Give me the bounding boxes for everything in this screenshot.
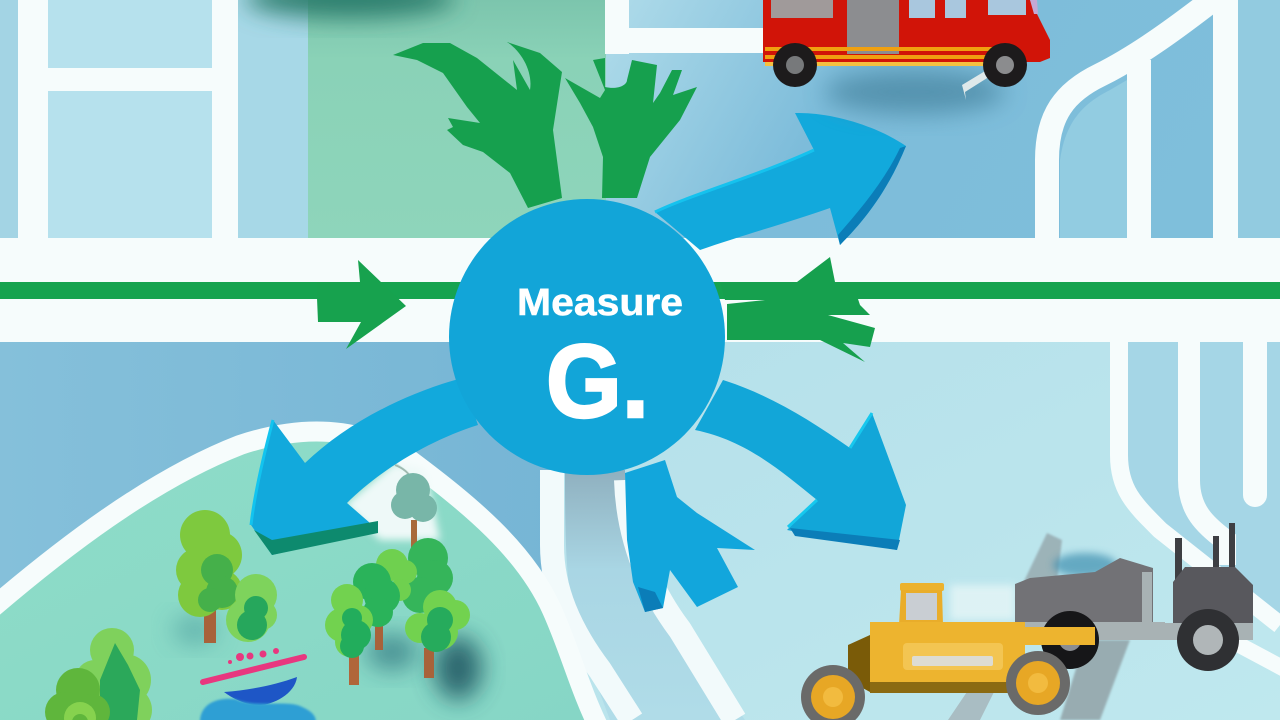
- pond sign: [200, 648, 316, 720]
- hub circle: [449, 199, 725, 475]
- dump truck: [948, 523, 1253, 720]
- stream below the hub: [565, 470, 745, 720]
- green branching arrow: upper right: [565, 58, 697, 198]
- green line across street: [0, 282, 1280, 299]
- dark shadow at top edge: [245, 0, 455, 18]
- stream banks: [552, 470, 735, 720]
- blue arrow: lower right: [695, 380, 906, 550]
- blue branching arrow: bottom: [625, 460, 755, 612]
- park with white border: [0, 431, 600, 720]
- fire truck: [763, 0, 1050, 114]
- hub label: G.: G.: [546, 324, 649, 440]
- yellow tractor: [801, 583, 1095, 720]
- faded tree: [391, 465, 437, 553]
- blue arrow: lower left: [251, 378, 478, 555]
- blue arrow: upper right: [655, 113, 906, 250]
- green city block: [308, 0, 606, 240]
- hub label: Measure: Measure: [517, 282, 683, 324]
- white patch beside arrow: [345, 462, 440, 540]
- tree cluster: right: [325, 538, 470, 685]
- green branching arrow: upper left: [393, 42, 562, 208]
- tree cluster: left: [176, 510, 277, 643]
- green arrow: left inflow: [317, 260, 406, 349]
- green branching arrow: right: [720, 257, 880, 362]
- trees: [45, 465, 482, 720]
- tree cluster: bottom left: [45, 628, 152, 720]
